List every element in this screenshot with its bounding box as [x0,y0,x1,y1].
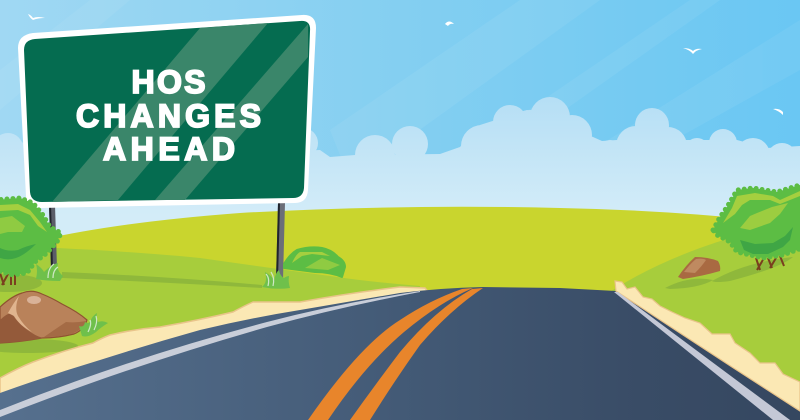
left white edge line [0,291,420,417]
sign highlights [52,23,308,202]
sign posts [49,203,285,280]
right white edge line [614,292,790,420]
left rock [0,291,87,343]
sign white border [18,15,316,208]
grass tufts [36,263,290,336]
sign text [76,64,261,167]
sign text: HOS [132,64,206,100]
birds [28,14,783,115]
left road shoulder [0,287,430,396]
right road shoulder [615,281,800,411]
tuft by right post [262,270,290,289]
ground shadows [0,257,793,353]
hill [40,207,800,320]
right rock [678,257,720,279]
orange centre lines [308,288,483,420]
sky [0,0,800,300]
left tree [0,198,61,285]
clouds [0,97,800,290]
right grass [598,222,800,420]
road sign [18,15,316,208]
right tree [713,185,800,270]
tuft by left post [36,263,63,281]
roadside bush [284,247,345,277]
sign text: CHANGES [76,98,261,134]
sign green panel [24,21,310,202]
left grass [0,248,420,395]
tuft by left rock [79,313,108,336]
sign text: AHEAD [103,131,235,167]
road surface [0,287,800,420]
